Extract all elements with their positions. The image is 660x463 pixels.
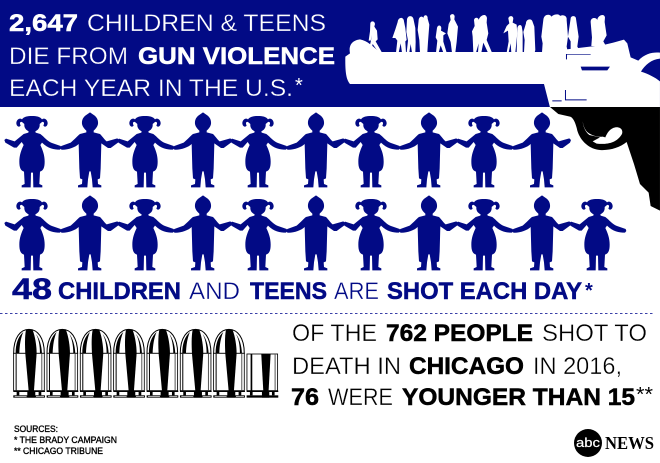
sources: * THE BRADY CAMPAIGN (14, 435, 117, 446)
sources: ** CHICAGO TRIBUNE (14, 446, 103, 457)
abc news logo: abc (576, 435, 601, 450)
bullets (13, 329, 278, 398)
trigger cutout (583, 121, 622, 144)
chicago statistic: CHICAGO (409, 353, 524, 380)
chicago statistic: WERE (328, 384, 393, 411)
shot each day statistic: SHOT EACH DAY (387, 278, 582, 305)
shot each day statistic: TEENS (250, 278, 327, 305)
children row 2 (4, 195, 626, 270)
shot each day statistic: AND (189, 278, 240, 305)
shot each day statistic: 48 (12, 273, 52, 306)
abc news logo (574, 429, 654, 457)
chicago statistic: SHOT TO (542, 320, 647, 347)
sources: SOURCES: (14, 424, 58, 435)
gun detail lines (552, 54, 610, 101)
headline: CHILDREN & TEENS (87, 10, 326, 37)
shot each day statistic: * (585, 280, 593, 302)
children row 1 (4, 112, 571, 187)
shot each day statistic (12, 273, 593, 306)
headline: EACH YEAR IN THE U.S. (9, 75, 293, 102)
gun grip (550, 107, 660, 211)
partial bullet (247, 354, 278, 398)
header band (0, 0, 660, 107)
chicago statistic (291, 320, 653, 411)
headline: * (295, 75, 303, 97)
chicago statistic: 76 (291, 384, 319, 411)
chicago statistic: 762 PEOPLE (386, 320, 533, 347)
chicago statistic: YOUNGER THAN 15 (402, 384, 635, 411)
headline: GUN VIOLENCE (138, 43, 335, 70)
crowd silhouettes (368, 14, 607, 53)
chicago statistic: ** (636, 384, 653, 406)
sources (14, 424, 117, 457)
chicago statistic: DEATH IN (292, 353, 401, 380)
headline (9, 10, 335, 102)
gun and crowd (345, 14, 660, 107)
shot each day statistic: CHILDREN (58, 278, 181, 305)
gun barrel and frame (345, 39, 660, 107)
chicago statistic: OF THE (292, 320, 377, 347)
chicago statistic: IN 2016, (533, 353, 622, 380)
shot each day statistic: ARE (334, 278, 379, 305)
headline: DIE FROM (9, 43, 128, 70)
headline: 2,647 (9, 10, 78, 37)
abc news logo: NEWS (605, 433, 654, 453)
